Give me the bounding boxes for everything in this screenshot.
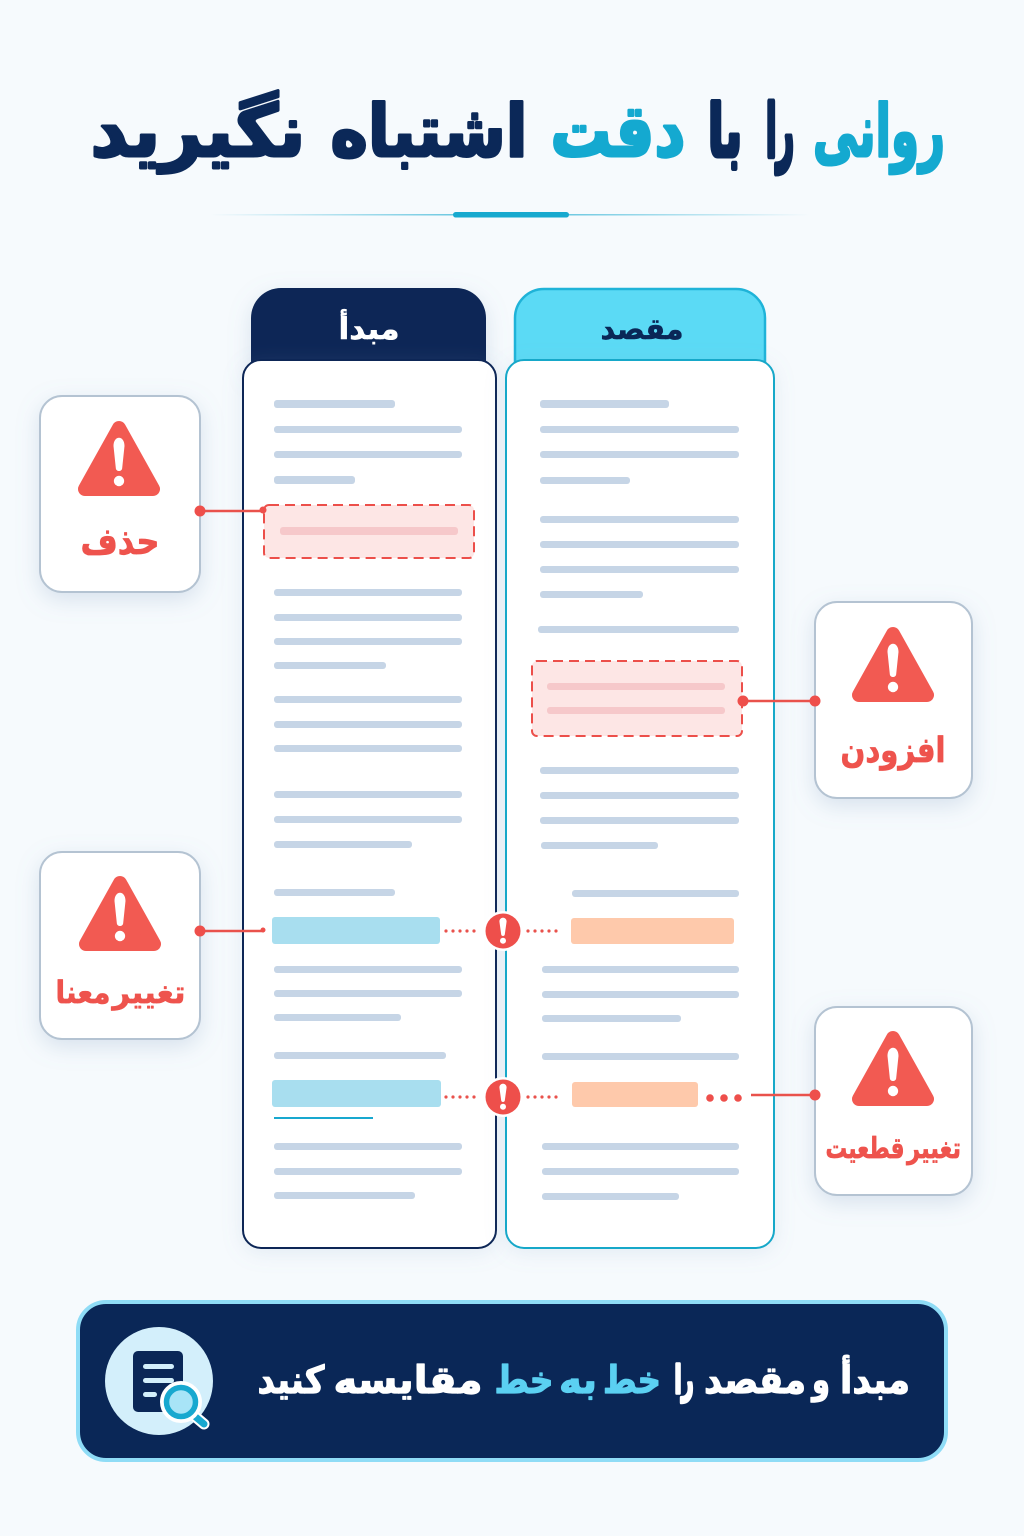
connector: certainty change (706, 1090, 820, 1102)
connector: meaning change (194, 926, 266, 936)
source header tab (251, 288, 486, 372)
banner message: خط (603, 1358, 661, 1402)
title: را (766, 89, 794, 174)
callout: meaning change (40, 852, 200, 1039)
icon: warning (859, 1038, 927, 1099)
target header tab (515, 289, 765, 372)
icon: warning (85, 428, 153, 489)
icon: document with magnifier (105, 1327, 213, 1435)
label: certainty change: تغییر (905, 1131, 961, 1165)
title: با (708, 89, 742, 173)
panel: source column (243, 288, 496, 1248)
connector: delete (194, 506, 266, 516)
label: meaning change: تغییر (111, 975, 186, 1011)
title: روانی (813, 89, 945, 174)
callout: certainty change (815, 1007, 972, 1195)
label: addition: افزودن (840, 731, 946, 771)
source document card (243, 360, 496, 1248)
title: اشتباه (330, 89, 528, 173)
title: نگیرید (90, 89, 306, 174)
target document card (506, 360, 774, 1248)
source blue highlight 2 (272, 1080, 441, 1119)
comparison marker 1 (446, 911, 562, 951)
target orange highlight 2 (572, 1082, 698, 1107)
source header tab: مبدأ (338, 309, 400, 347)
banner message: کنید (258, 1358, 325, 1402)
added highlight (532, 661, 742, 736)
icon: warning (859, 634, 927, 695)
source blue highlight 1 (272, 917, 440, 944)
banner message: و (810, 1358, 830, 1403)
banner message: را (674, 1358, 694, 1402)
panel: target column (506, 289, 774, 1248)
target orange highlight 1 (571, 918, 734, 944)
label: meaning change (56, 975, 186, 1011)
banner message (258, 1355, 910, 1403)
label: delete: حذف (80, 520, 160, 563)
title: دقت (550, 89, 686, 173)
callout: addition (815, 602, 972, 798)
footer banner (78, 1302, 946, 1460)
label: meaning change: معنا (56, 975, 110, 1011)
banner message: مبدأ (840, 1355, 910, 1402)
callout: delete (40, 396, 200, 592)
target text lines (538, 400, 739, 1200)
target header tab: مقصد (600, 312, 684, 346)
title (90, 89, 945, 174)
icon: warning (86, 883, 154, 944)
connector: addition (738, 696, 820, 706)
banner message: مقصد (704, 1358, 806, 1402)
banner message: خط (494, 1358, 554, 1402)
source text lines (274, 400, 462, 1199)
deleted highlight (264, 505, 474, 558)
comparison marker 2 (446, 1077, 562, 1117)
title divider (210, 212, 810, 218)
banner message: به (559, 1358, 597, 1402)
banner message: مقایسه (334, 1358, 482, 1402)
label: certainty change: قطعیت (826, 1131, 904, 1165)
